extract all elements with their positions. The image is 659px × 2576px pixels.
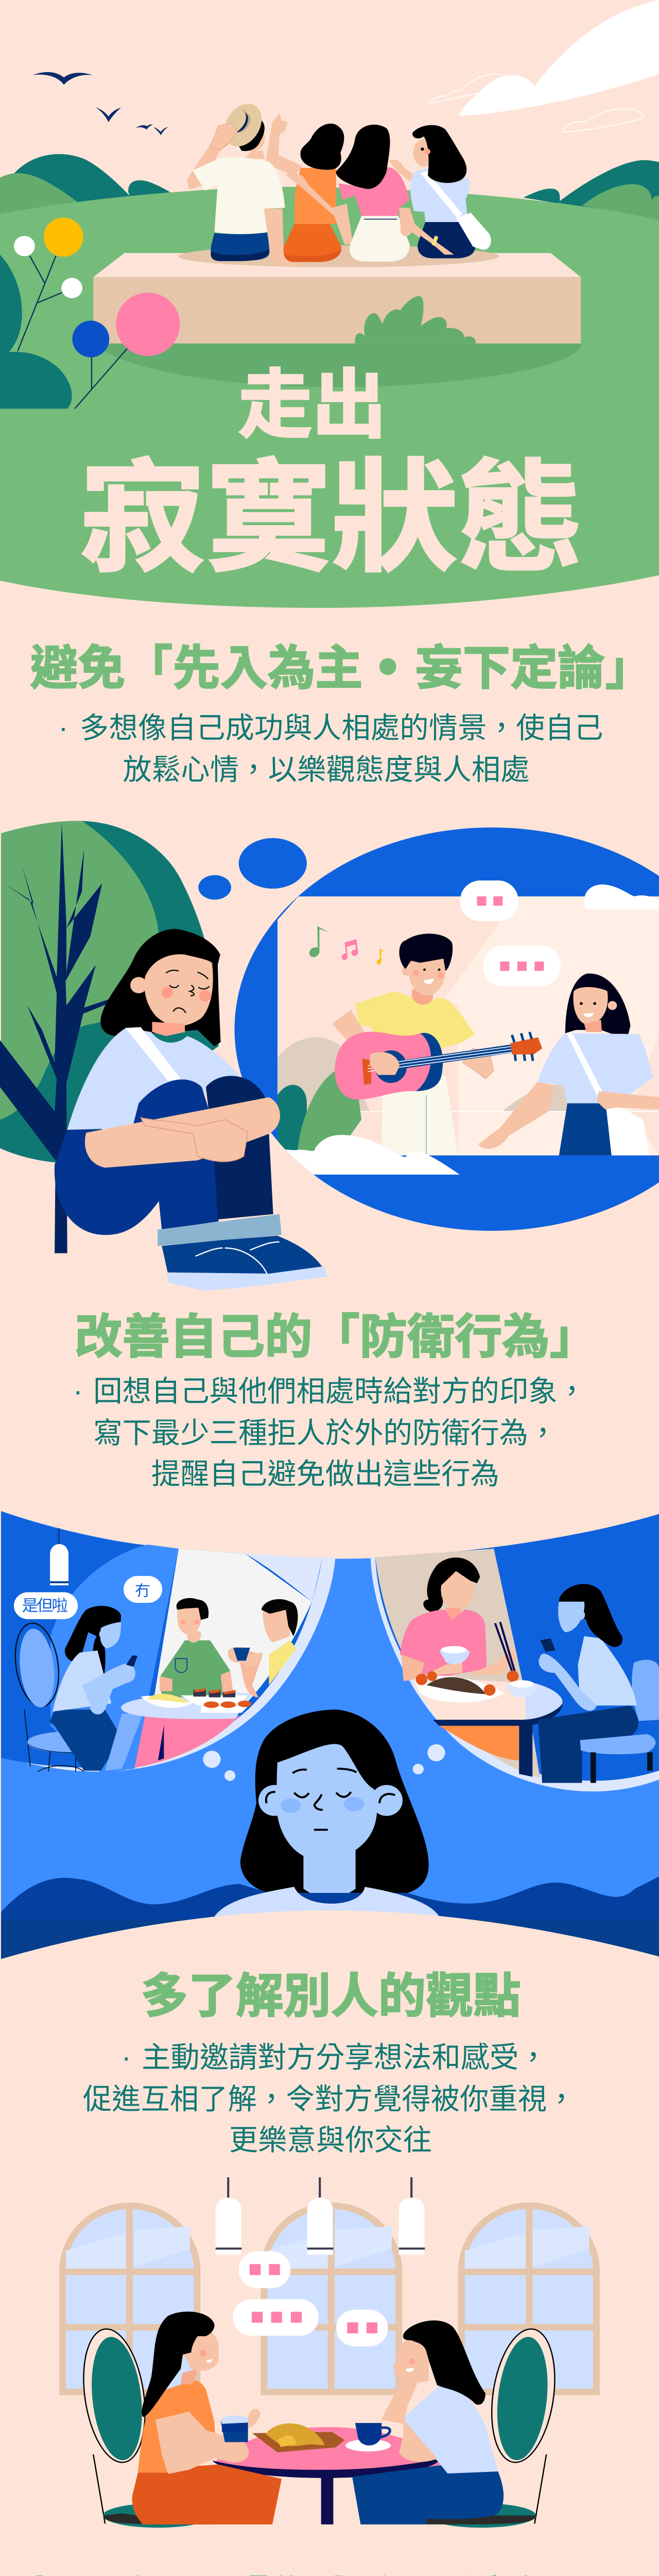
pink shirt woman xyxy=(400,1557,517,1681)
panel: others' viewpoints xyxy=(0,1910,659,2528)
curved divider xyxy=(0,1910,659,1998)
restaurant wall xyxy=(153,1549,312,1701)
speech bubble: 冇 xyxy=(124,1576,162,1603)
chair left xyxy=(76,2325,212,2528)
big green hill xyxy=(0,187,659,608)
distant hills xyxy=(278,1037,571,1111)
waves xyxy=(0,1877,659,1962)
bubbles xyxy=(203,1744,445,1781)
body text xyxy=(73,1375,586,1490)
heading: 避免 xyxy=(30,642,125,695)
heading: 妄下定論」 xyxy=(415,642,653,695)
background hills xyxy=(0,154,659,220)
speech bubble: 是但啦: 是但啦 xyxy=(22,1597,68,1615)
window 2 xyxy=(264,2206,399,2392)
body text xyxy=(83,2041,576,2156)
dream scene xyxy=(278,885,659,1175)
person: pink shirt xyxy=(336,125,456,262)
heading: 改善自己的「防衛行為」 xyxy=(75,1310,597,1363)
table left xyxy=(121,1693,252,1768)
panel: hero xyxy=(0,0,659,608)
title line 1: 走出 xyxy=(238,364,386,447)
body text: 促進互相了解，令對方覺得被你重視， xyxy=(83,2082,576,2115)
panel: avoid prejudgment xyxy=(0,636,659,1291)
body text: 多想像自己成功與人相處的情景，使自己 xyxy=(80,711,603,744)
left edge strips xyxy=(0,824,1,1963)
left thought bubble xyxy=(0,1511,445,1781)
table right xyxy=(414,1670,562,1777)
right thought bubble xyxy=(371,1514,659,1791)
cloud small xyxy=(584,885,659,909)
body text: 更樂意與你交往 xyxy=(229,2124,432,2156)
birds xyxy=(33,72,168,135)
bench xyxy=(93,245,581,344)
body text: 回想自己與他們相處時給對方的印象， xyxy=(93,1375,586,1408)
bubble middle xyxy=(233,2299,319,2336)
croissant tray xyxy=(252,2424,344,2452)
window 3 xyxy=(461,2206,596,2392)
heading: • xyxy=(378,636,397,697)
title line 2: 寂寞狀態 xyxy=(80,451,583,587)
left plants xyxy=(0,217,180,409)
speech bubble: 是但啦 xyxy=(14,1592,78,1619)
title xyxy=(80,364,583,587)
phone girl xyxy=(49,1606,143,1771)
dream circle xyxy=(235,827,659,1231)
sad girl hugging knees xyxy=(55,929,328,1291)
speech bubble: 冇: 冇 xyxy=(135,1583,150,1600)
body text xyxy=(58,711,603,786)
man in green xyxy=(160,1598,233,1698)
music notes xyxy=(309,926,385,964)
chair xyxy=(10,1620,107,1771)
blue background xyxy=(0,1511,659,1962)
speech bubble 2 xyxy=(460,880,518,921)
guitar xyxy=(335,1032,542,1099)
cloud xyxy=(459,0,659,116)
bust over waves xyxy=(214,1887,439,1917)
panel: defensive behaviour xyxy=(0,1310,659,1962)
bush xyxy=(355,296,476,344)
outline clouds xyxy=(429,74,644,132)
chair right xyxy=(427,2325,563,2528)
plants xyxy=(278,1085,307,1156)
tree xyxy=(0,821,218,1253)
table xyxy=(212,2427,441,2524)
lighter alcove xyxy=(50,1545,179,1773)
heading xyxy=(30,636,653,697)
thought bubbles xyxy=(198,838,307,900)
person: side-facing woman xyxy=(389,125,491,258)
beige room xyxy=(375,1549,540,1778)
person: orange shirt xyxy=(284,124,353,262)
heading: 「先入為主 xyxy=(125,642,362,695)
body text: · xyxy=(73,1375,83,1407)
woman right blue xyxy=(352,2320,504,2524)
coffee cup xyxy=(345,2423,391,2451)
central woman xyxy=(212,1709,441,1929)
window 1 xyxy=(63,2206,197,2392)
pendant lamps xyxy=(216,2177,425,2255)
windows xyxy=(63,2206,596,2392)
speech bubble 3 xyxy=(483,945,561,987)
body text: 提醒自己避免做出這些行為 xyxy=(151,1458,499,1490)
body text: 放鬆心情，以樂觀態度與人相處 xyxy=(123,753,530,786)
body text: 寫下最少三種拒人於外的防衛行為， xyxy=(93,1416,557,1449)
speech bubbles xyxy=(233,2251,388,2346)
bubble right xyxy=(336,2310,388,2346)
woman left orange xyxy=(132,2312,282,2524)
body text: · xyxy=(122,2041,131,2073)
woman listening xyxy=(478,974,659,1156)
body text: · xyxy=(58,711,68,743)
man in yellow with cup xyxy=(228,1599,298,1698)
heading: 多了解別人的觀點 xyxy=(141,1970,521,2023)
pendant lamp xyxy=(50,1528,68,1585)
person: man with hat xyxy=(187,97,303,266)
darker band above curve xyxy=(0,1919,659,1963)
man with guitar xyxy=(332,934,542,1156)
bench shadow xyxy=(93,344,581,387)
body text: 主動邀請對方分享想法和感受， xyxy=(142,2041,548,2074)
front cloud xyxy=(278,1135,460,1175)
phone girl right xyxy=(538,1584,659,1783)
light beams xyxy=(445,896,659,1156)
food left xyxy=(141,1688,251,1713)
bubble top xyxy=(239,2251,290,2288)
